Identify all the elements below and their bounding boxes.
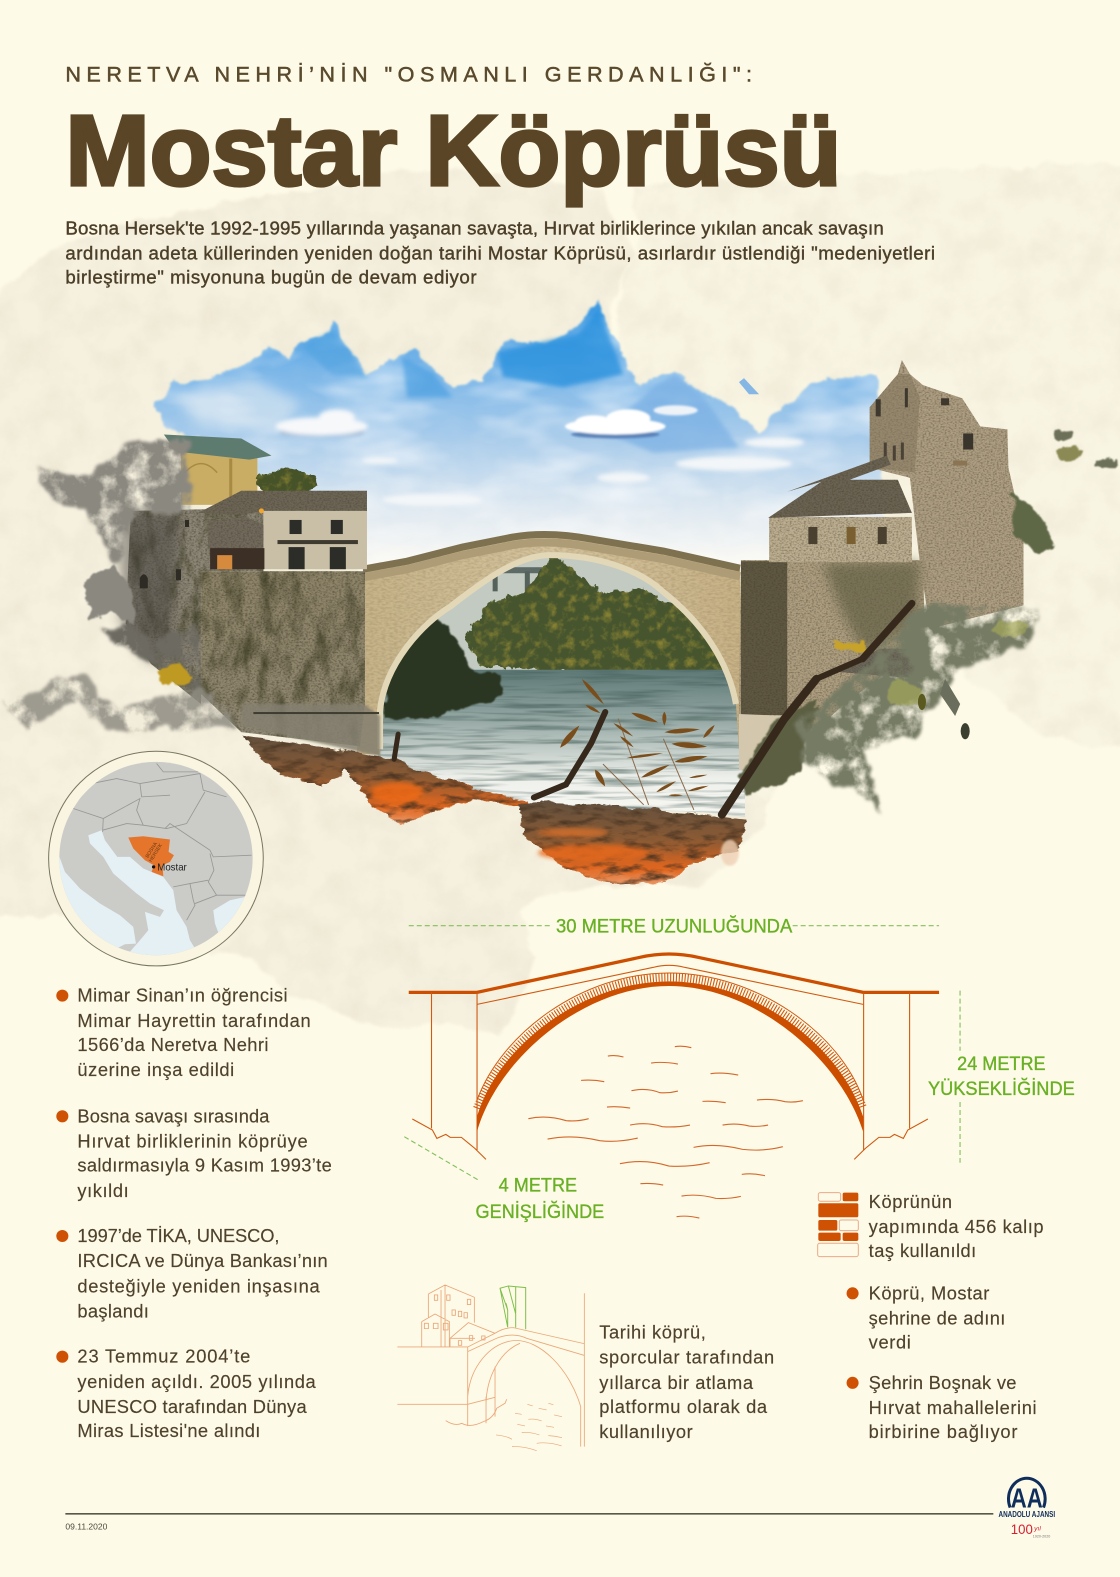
- bullet 2: [56, 1105, 332, 1201]
- bullet: city name: [847, 1282, 1005, 1353]
- autumn leaves: [558, 678, 716, 796]
- vertical piers: [432, 992, 910, 1150]
- icon: stone blocks: [818, 1193, 858, 1257]
- text: diving platform: sporcular tarafından: [599, 1347, 774, 1368]
- bullet 3: [56, 1225, 328, 1321]
- grey stone block: [121, 508, 263, 704]
- tree: [256, 470, 317, 496]
- heading: kicker: NERETVA NEHRİ’NİN "OSMANLI GERDANLIĞI":: [65, 61, 757, 86]
- country label: HERSEK: [148, 842, 164, 863]
- drips: [918, 679, 970, 739]
- thin clouds: [362, 437, 804, 506]
- bullet 4: yeniden açıldı. 2005 yılında: [77, 1371, 317, 1392]
- wall ledge: [241, 704, 380, 756]
- timeline bullets: [56, 985, 332, 1441]
- label: width: 4 METRE: [499, 1175, 577, 1197]
- bullet: connecting quarters: Şehrin Boşnak ve: [869, 1372, 1016, 1393]
- bullet 1: [56, 985, 311, 1080]
- logo arc: [1008, 1478, 1045, 1508]
- green tower: [500, 1286, 526, 1329]
- logo 100: 100: [1011, 1521, 1033, 1537]
- rocks: [412, 1119, 928, 1159]
- sky: [156, 300, 885, 573]
- upper wall: [769, 517, 912, 562]
- label: width: [476, 1175, 604, 1223]
- roof: [768, 456, 912, 518]
- bridge arch: [357, 532, 742, 754]
- tower: [870, 360, 1023, 629]
- logo: Anadolu Ajansi: [998, 1478, 1055, 1539]
- bullet: connecting quarters: [847, 1372, 1037, 1442]
- country label: BOSNA: [145, 841, 159, 859]
- bullet 4: UNESCO tarafından Dünya: [77, 1396, 307, 1417]
- splatter marks: [1052, 428, 1118, 467]
- parapet line: [477, 965, 863, 1004]
- trees behind the arch: [377, 551, 744, 774]
- label: height: 24 METRE: [957, 1053, 1046, 1075]
- rock island: [384, 615, 503, 719]
- lower wall: [739, 560, 925, 749]
- branches: [394, 603, 912, 815]
- photo: Mostar bridge watercolor: [0, 300, 1118, 885]
- yellow shrub: [159, 664, 189, 686]
- date: 09.11.2020: [65, 1522, 108, 1532]
- yellow building: [164, 434, 271, 505]
- foreground orange rocks: [243, 736, 746, 885]
- deck line: [409, 954, 939, 992]
- bullet 3: desteğiyle yeniden inşasına: [77, 1275, 321, 1296]
- locator map: [43, 751, 263, 970]
- grey brush stroke: [0, 674, 241, 732]
- bullet 2: yıkıldı: [77, 1180, 129, 1201]
- bridge dimension diagram: [404, 926, 960, 1218]
- text: diving platform: [599, 1322, 774, 1442]
- text: stone count: Köprünün: [869, 1191, 952, 1212]
- bullet 4: 23 Temmuz 2004’te: [77, 1346, 250, 1367]
- bullet: city name: verdi: [869, 1332, 911, 1353]
- bullet 2: saldırmasıyla 9 Kasım 1993’te: [77, 1155, 332, 1176]
- label: height: [928, 1053, 1075, 1100]
- logo years: 1920-2020: [1033, 1535, 1050, 1539]
- bullet 1: 1566’da Neretva Nehri: [77, 1034, 268, 1055]
- bullet 1: Mimar Hayrettin tarafından: [77, 1010, 311, 1031]
- bullet 4: Miras Listesi'ne alındı: [77, 1420, 260, 1441]
- bullet: city name: Köprü, Mostar: [869, 1282, 989, 1303]
- cloud: [275, 409, 368, 436]
- grey splash: [37, 440, 193, 563]
- cloud: [565, 405, 698, 438]
- houses: [422, 1285, 495, 1347]
- Mostar marker: [152, 865, 155, 869]
- house: [198, 491, 367, 569]
- main wall: [201, 571, 365, 746]
- intro paragraph: birleştirme" misyonuna bugün de devam ediyor: [65, 267, 477, 288]
- river: [378, 670, 745, 820]
- label: width: GENİŞLİĞİNDE: [476, 1200, 604, 1223]
- text: stone count: [869, 1191, 1044, 1261]
- riverbank: [446, 1399, 507, 1425]
- green measure lines: [404, 926, 960, 1180]
- logo letters: AA: [1011, 1483, 1043, 1514]
- text: diving platform: Tarihi köprü,: [599, 1322, 706, 1343]
- bullet 3: 1997’de TİKA, UNESCO,: [77, 1225, 280, 1246]
- bullet 2: Bosna savaşı sırasında: [77, 1105, 270, 1126]
- label: length: 30 METRE UZUNLUĞUNDA: [556, 914, 793, 937]
- bush: [1010, 493, 1056, 555]
- water ripples: [528, 1046, 803, 1218]
- intro paragraph: [65, 217, 935, 288]
- text: diving platform: kullanılıyor: [599, 1421, 693, 1442]
- map frame: [49, 751, 263, 966]
- map land and sea: [59, 762, 253, 956]
- text: stone count: yapımında 456 kalıp: [869, 1216, 1044, 1237]
- ripples: [496, 1403, 562, 1451]
- label: height: YÜKSEKLİĞİNDE: [928, 1077, 1075, 1100]
- grass: [739, 699, 819, 795]
- paper watercolor blotch: [0, 161, 1120, 1036]
- yellow flowers: [834, 641, 865, 651]
- bullet 3: başlandı: [77, 1300, 149, 1321]
- bullet 3: IRCICA ve Dünya Bankası’nın: [77, 1250, 328, 1271]
- text: stone count: taş kullanıldı: [869, 1240, 976, 1261]
- text: diving platform: yıllarca bir atlama: [599, 1372, 754, 1393]
- heading: main title: Mostar Köprüsü: [65, 95, 842, 207]
- Bosnia and Herzegovina: [128, 836, 174, 876]
- bullet: connecting quarters: Hırvat mahallelerini: [869, 1397, 1037, 1418]
- bullet: city name: şehrine de adını: [869, 1308, 1005, 1329]
- bullet 2: Hırvat birliklerinin köprüye: [77, 1131, 308, 1152]
- logo name: ANADOLU AJANSI: [998, 1510, 1055, 1519]
- intro paragraph: Bosna Hersek'te 1992-1995 yıllarında yaşanan savaşta, Hırvat birliklerince yıkılan ancak savaşın: [65, 217, 884, 238]
- bullet 1: üzerine inşa edildi: [77, 1059, 234, 1080]
- arch hatch band: [477, 977, 863, 1108]
- grey green smoke: [799, 603, 1041, 817]
- left buildings: [0, 434, 380, 756]
- bridge line drawing: [397, 1285, 584, 1451]
- bullet 1: Mimar Sinan’ın öğrencisi: [77, 985, 288, 1006]
- text: diving platform: platformu olarak da: [599, 1396, 768, 1417]
- bullet: connecting quarters: birbirine bağlıyor: [869, 1421, 1017, 1442]
- side wall and deck: [397, 1293, 584, 1447]
- arch outer line: [477, 973, 863, 1100]
- Mostar label: Mostar: [157, 863, 188, 874]
- lower roof: [836, 649, 920, 679]
- arch thick intrados: [477, 981, 863, 1132]
- right buildings: [739, 360, 1118, 817]
- bullet 4: [56, 1346, 317, 1441]
- footer rule: [65, 1513, 993, 1515]
- intro paragraph: ardından adeta küllerinden yeniden doğan tarihi Mostar Köprüsü, asırlardır üstlendiği "medeniyetleri: [65, 242, 935, 263]
- logo yil: yıl: [1033, 1526, 1041, 1533]
